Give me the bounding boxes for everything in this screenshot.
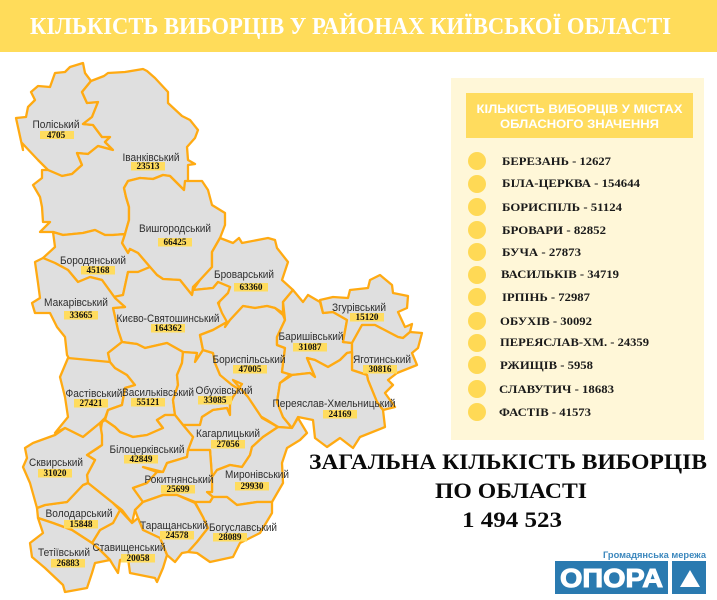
list item: Ірпінь xyxy=(468,288,590,306)
district: Богуславський xyxy=(188,497,272,562)
label: Володарський: 15848 xyxy=(70,519,93,529)
label: Макарівський: 33665 xyxy=(70,310,93,320)
panel heading xyxy=(466,93,693,138)
label: Згурівський xyxy=(332,302,386,322)
label: Богуславський xyxy=(209,522,277,542)
total voters callout: ПО ОБЛАСТІ xyxy=(435,478,587,503)
logo: ОПОРА civic network: Громадянська мережа xyxy=(603,550,707,561)
label: Васильківський: 55121 xyxy=(137,397,160,407)
label: Поліський: 4705 xyxy=(47,130,66,140)
list item: Ржищів xyxy=(468,356,593,374)
district: Вишгородський xyxy=(122,175,225,295)
label: Миронівський: Миронівський xyxy=(225,469,289,481)
district: Бориспільський xyxy=(200,306,292,428)
list item: Березань: БЕРЕЗАНЬ - 12627 xyxy=(502,154,611,168)
label: Переяслав-Хмельницький: 24169 xyxy=(329,409,352,419)
label: Обухівський: 33085 xyxy=(204,395,227,405)
label: Білоцерківський xyxy=(110,444,184,464)
district: Києво-Святошинський xyxy=(113,267,230,362)
label: Макарівський xyxy=(44,297,108,320)
label: Сквирський: 31020 xyxy=(44,468,67,478)
label: Володарський xyxy=(46,508,112,529)
list item: Бровари: БРОВАРИ - 82852 xyxy=(502,223,606,237)
district: Васильківський xyxy=(105,342,183,437)
district: Сквирський xyxy=(23,423,102,508)
panel: cities of oblast significance xyxy=(451,78,704,440)
label: Кагарлицький xyxy=(196,428,260,449)
label: Рокитнянський xyxy=(144,474,214,494)
label: Іванківський: Іванківський xyxy=(122,152,180,164)
label: Баришівський: Баришівський xyxy=(278,331,344,343)
label: Броварський: 63360 xyxy=(240,282,263,292)
label: Яготинський: Яготинський xyxy=(353,354,411,366)
list item: Васильків: ВАСИЛЬКІВ - 34719 xyxy=(501,267,619,281)
label: Баришівський: 31087 xyxy=(299,342,322,352)
list item: Бориспіль: БОРИСПІЛЬ - 51124 xyxy=(502,200,622,214)
label: Переяслав-Хмельницький: Переяслав-Хмельницький xyxy=(272,398,396,410)
label: Сквирський xyxy=(29,457,83,478)
district: Іванківський xyxy=(33,69,198,235)
label: Васильківський: Васильківський xyxy=(122,387,194,399)
label: Ставищенський: 20058 xyxy=(127,553,150,563)
label: Богуславський: Богуславський xyxy=(209,522,277,534)
label: Обухівський: Обухівський xyxy=(196,385,252,397)
label: Фастівський: 27421 xyxy=(80,398,103,408)
district: Ставищенський xyxy=(92,510,167,582)
label: Яготинський xyxy=(353,354,411,374)
label: Вишгородський: Вишгородський xyxy=(139,223,211,235)
label: Києво-Святошинський: 164362 xyxy=(154,323,182,333)
district: Броварський xyxy=(193,238,293,327)
list item: Обухів: ОБУХІВ - 30092 xyxy=(500,314,592,328)
label: Києво-Святошинський xyxy=(116,313,220,333)
label: Згурівський: 15120 xyxy=(356,312,379,322)
list item: Буча xyxy=(468,243,581,261)
list item: Березань xyxy=(468,152,611,170)
list item: Обухів xyxy=(468,312,592,330)
label: Макарівський: Макарівський xyxy=(44,297,108,309)
district: Яготинський xyxy=(352,325,422,410)
label: Сквирський: Сквирський xyxy=(29,457,83,469)
list item: Фастів xyxy=(468,403,591,421)
logo: ОПОРА civic network: ОПОРА xyxy=(560,563,663,593)
district: Білоцерківський xyxy=(87,415,193,523)
logo: ОПОРА civic network xyxy=(555,550,707,594)
total voters callout: ЗАГАЛЬНА КІЛЬКІСТЬ ВИБОРЦІВ xyxy=(309,449,707,474)
label: Кагарлицький: 27056 xyxy=(217,439,240,449)
district: Баришівський xyxy=(277,290,352,377)
label: Богуславський: 28089 xyxy=(219,532,242,542)
district: Миронівський xyxy=(207,418,307,505)
label: Поліський xyxy=(32,119,80,140)
label: Таращанський: 24578 xyxy=(166,530,189,540)
list item: Біла-Церква: БІЛА-ЦЕРКВА - 154644 xyxy=(502,176,640,190)
label: Таращанський: Таращанський xyxy=(140,520,208,532)
district: Тетіївський xyxy=(30,518,110,592)
label: Кагарлицький: Кагарлицький xyxy=(196,428,260,440)
list item: Ірпінь: ІРПІНЬ - 72987 xyxy=(502,290,590,304)
label: Ставищенський xyxy=(92,542,166,563)
list item: Переяслав-Хм.: ПЕРЕЯСЛАВ-ХМ. - 24359 xyxy=(500,335,649,349)
label: Фастівський xyxy=(66,388,122,408)
district: Таращанський xyxy=(135,495,208,562)
label: Вишгородський xyxy=(139,223,211,247)
district: Кагарлицький xyxy=(183,380,278,477)
label: Миронівський: 29930 xyxy=(241,481,264,491)
label: Миронівський xyxy=(225,469,289,491)
district: Згурівський xyxy=(320,275,412,343)
label: Баришівський xyxy=(278,331,344,352)
total voters callout xyxy=(309,449,707,532)
total voters callout: 1 494 523 xyxy=(462,507,562,532)
label: Бородянський: Бородянський xyxy=(60,255,126,267)
label: Рокитнянський: Рокитнянський xyxy=(144,474,214,486)
label: Васильківський xyxy=(122,387,194,407)
list item: Переяслав-Хм. xyxy=(468,334,649,352)
district: Володарський xyxy=(37,483,120,543)
label: Бориспільський: 47005 xyxy=(239,364,262,374)
district: Рокитнянський xyxy=(133,450,213,502)
label: Бориспільський xyxy=(212,354,286,374)
district: Обухівський xyxy=(173,350,242,425)
map of Kyiv oblast districts xyxy=(16,63,422,592)
label: Тетіївський: 26883 xyxy=(57,558,80,568)
label: Тетіївський xyxy=(38,547,90,568)
label: Іванківський xyxy=(122,152,180,171)
label: Володарський: Володарський xyxy=(46,508,112,520)
district value labels xyxy=(29,119,411,568)
list item: Славутич xyxy=(468,380,614,398)
list item: Васильків xyxy=(468,266,619,284)
district: Бородянський xyxy=(43,230,150,298)
label: Києво-Святошинський: Києво-Святошинський xyxy=(116,313,220,325)
list item: Славутич: СЛАВУТИЧ - 18683 xyxy=(499,382,614,396)
label: Поліський: Поліський xyxy=(32,119,80,131)
label: Обухівський xyxy=(196,385,252,405)
label: Ставищенський: Ставищенський xyxy=(92,542,166,554)
label: Білоцерківський: Білоцерківський xyxy=(110,444,184,456)
title banner: КІЛЬКІСТЬ ВИБОРЦІВ У РАЙОНАХ КИЇВСЬКОЇ ОБЛАСТІ xyxy=(30,14,671,40)
label: Білоцерківський: 42849 xyxy=(130,454,153,464)
label: Яготинський: 30816 xyxy=(369,364,392,374)
list item: Біла-Церква xyxy=(468,175,640,193)
district: Макарівський xyxy=(32,258,125,362)
panel heading: ОБЛАСНОГО ЗНАЧЕННЯ xyxy=(500,117,659,131)
label: Іванківський: 23513 xyxy=(137,161,160,171)
title banner xyxy=(0,0,717,52)
label: Броварський: Броварський xyxy=(214,269,274,281)
list item: Бориспіль xyxy=(468,198,622,216)
list item: Фастів: ФАСТІВ - 41573 xyxy=(499,405,591,419)
district: Фастівський xyxy=(55,358,135,437)
list item: Ржищів: РЖИЩІВ - 5958 xyxy=(500,358,593,372)
label: Переяслав-Хмельницький xyxy=(272,398,396,419)
label: Фастівський: Фастівський xyxy=(66,388,122,400)
label: Згурівський: Згурівський xyxy=(332,302,386,314)
label: Тетіївський: Тетіївський xyxy=(38,547,90,559)
district: Поліський xyxy=(16,63,113,176)
list item: Бровари xyxy=(468,221,606,239)
list item: Буча: БУЧА - 27873 xyxy=(502,245,581,259)
label: Таращанський xyxy=(140,520,208,540)
label: Бориспільський: Бориспільський xyxy=(212,354,286,366)
label: Рокитнянський: 25699 xyxy=(167,484,190,494)
label: Бородянський xyxy=(60,255,126,275)
label: Вишгородський: 66425 xyxy=(164,237,187,247)
district: Переяслав-Хмельницький xyxy=(277,352,385,448)
label: Бородянський: 45168 xyxy=(87,265,110,275)
panel heading: КІЛЬКІСТЬ ВИБОРЦІВ У МІСТАХ xyxy=(476,102,682,116)
label: Броварський xyxy=(214,269,274,292)
